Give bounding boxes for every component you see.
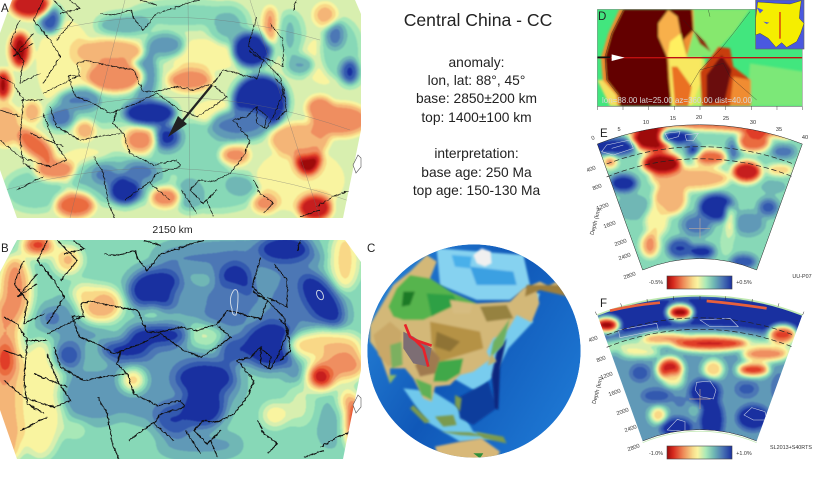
section outline E [597, 125, 802, 270]
title: Central China - CC [404, 10, 553, 30]
colour bar F: -1.0% [649, 451, 663, 457]
anomaly text block: anomaly: [449, 55, 504, 70]
anomaly text block: lon, lat: 88°, 45° [428, 73, 525, 88]
Eurasia land [370, 255, 570, 402]
depth axis F: 400 [588, 335, 599, 344]
depth axis F: 2000 [616, 407, 630, 417]
contours E [602, 132, 698, 155]
contours F [618, 318, 767, 431]
section start marker [597, 54, 625, 61]
panel A: tomography map at 2150 km [0, 0, 361, 218]
top axis labels E: 15 [670, 116, 676, 122]
label E: E [600, 128, 608, 140]
depth axis F: 1600 [608, 388, 622, 398]
depth axis F: 2800 [627, 443, 641, 453]
interpretation text block: top age: 150-130 Ma [413, 183, 540, 198]
Greenland ice [473, 248, 492, 267]
velocity field E [598, 124, 802, 270]
section outline F [643, 430, 757, 441]
panel F: SL2013+S40RTS cross-section [595, 294, 804, 443]
reference cross [689, 389, 711, 409]
red slab outline [405, 324, 432, 367]
depth axis E: 2000 [614, 238, 628, 248]
scale marker A [353, 155, 361, 173]
colour bar F: +1.0% [736, 451, 752, 457]
model name F: SL2013+S40RTS [770, 445, 812, 451]
depth axis E: 0 [591, 135, 596, 142]
panel E: UU-P07 cross-section [597, 124, 802, 270]
depth axis F: 800 [596, 355, 607, 364]
blue anomalies [232, 32, 272, 68]
depth axis E: 400 [586, 165, 597, 174]
model name E: UU-P07 [792, 274, 812, 280]
map colours [597, 9, 803, 106]
red anomalies [87, 61, 143, 93]
profile parameters: lon=88.00 lat=25.00 az=360.00 dist=40.00 [602, 96, 752, 105]
depth axis E: 1200 [596, 202, 610, 212]
top axis labels E: 40 [802, 135, 808, 141]
top edge band F [597, 296, 802, 315]
velocity field F [597, 296, 802, 441]
deep basins and trenches [457, 338, 507, 425]
depth axis E [586, 135, 637, 281]
anomaly text block: top: 1400±100 km [421, 110, 532, 125]
velocity anomaly field A [0, 0, 361, 218]
depth axis E: 800 [592, 183, 603, 192]
coast lines D [605, 10, 757, 100]
Indonesia and Philippines islands [410, 395, 507, 443]
velocity anomaly field B [0, 240, 361, 459]
top axis labels E: 20 [696, 115, 702, 121]
top axis labels E [617, 115, 808, 141]
coastlines and borders A [0, 0, 360, 218]
panel C: globe with outlined Tibet [367, 244, 581, 465]
colour bar E: +0.5% [736, 280, 752, 286]
label B: B [1, 243, 9, 255]
D frame ticks [597, 106, 802, 110]
graticule A [5, 0, 361, 218]
interpretation text block: base age: 250 Ma [421, 165, 532, 180]
top axis labels E: 30 [750, 120, 756, 126]
inset location map [756, 0, 804, 49]
410 and 660 km dashes F [607, 318, 793, 347]
depth axis E: 2800 [623, 271, 637, 281]
410 and 660 km dashes E [607, 147, 793, 177]
depth axis F [588, 335, 641, 453]
label D: D [598, 11, 606, 23]
profile line [597, 56, 802, 60]
colour bar E [649, 276, 752, 289]
depth axis F: 1200 [600, 371, 614, 381]
top axis labels E: 10 [643, 120, 649, 126]
panel D: location map [597, 9, 803, 110]
red top strips F [610, 301, 767, 311]
contour outlines B [230, 289, 325, 315]
colour bar F [649, 446, 752, 459]
colour bar E: -0.5% [649, 280, 663, 286]
broad yellow and teal tones [37, 20, 93, 110]
interpretation text block [413, 146, 540, 198]
Australia [434, 437, 502, 458]
anomaly text block [416, 55, 537, 125]
scale marker B [353, 395, 361, 413]
depth axis E: 2400 [618, 252, 632, 262]
coastlines and borders B [4, 240, 364, 459]
ocean [367, 244, 581, 458]
Tibet grey block [403, 332, 432, 367]
label C: C [367, 243, 375, 255]
top axis labels E: 5 [617, 127, 621, 133]
label F: F [600, 298, 607, 310]
interpretation text block: interpretation: [434, 146, 519, 161]
reference cross [689, 218, 710, 238]
depth axis F: 2400 [624, 424, 638, 434]
label A: A [1, 3, 9, 15]
panel B: tomography map [0, 240, 361, 459]
depth axis E: 1600 [603, 220, 617, 230]
anomaly text block: base: 2850±200 km [416, 91, 537, 106]
top axis labels E: 25 [723, 116, 729, 122]
depth label: 2150 km [152, 224, 193, 236]
depth axis E: Depth (km) [590, 207, 603, 236]
arrow: anomaly direction [168, 85, 212, 137]
shelf seas [403, 248, 540, 442]
depth axis F: Depth (km) [592, 376, 605, 405]
top axis labels E: 35 [776, 127, 782, 133]
top ticks F [595, 296, 804, 315]
